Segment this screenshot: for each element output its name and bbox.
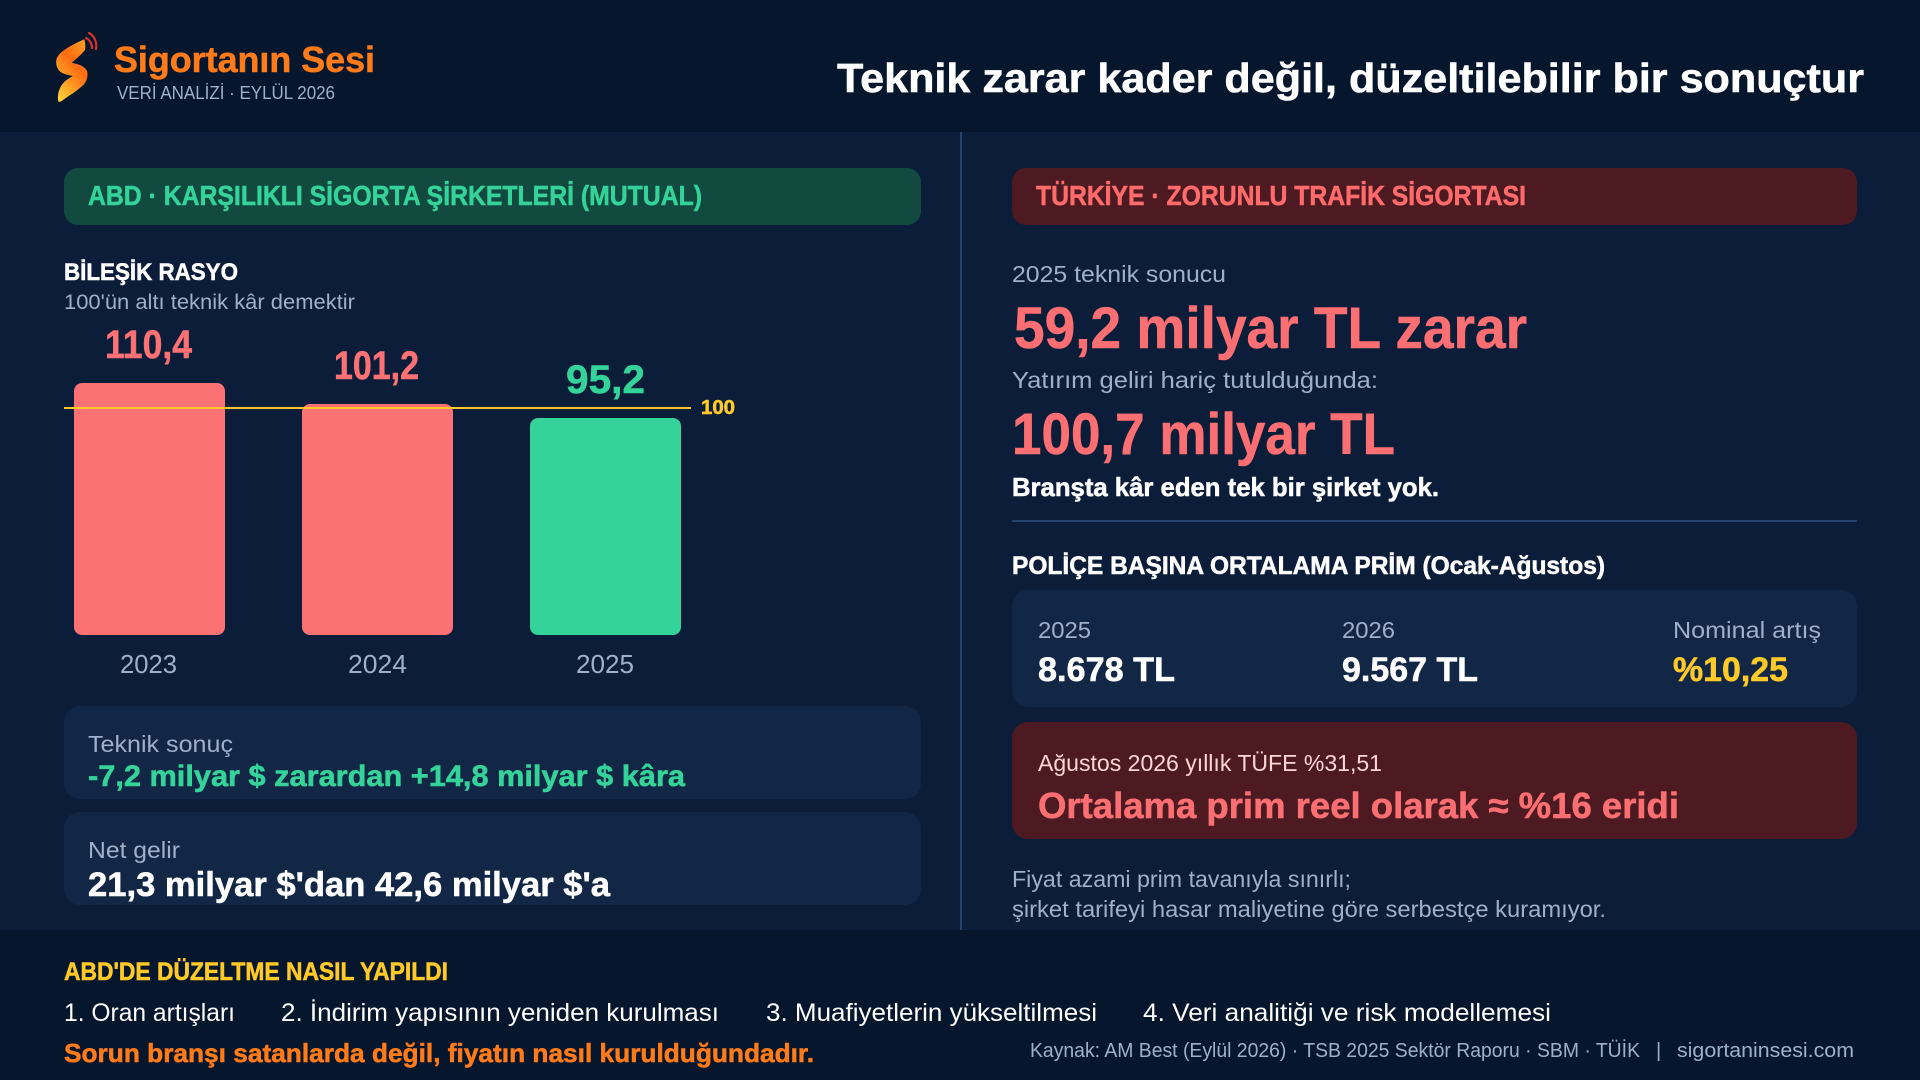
steps list: 1. Oran artışları bbox=[64, 999, 235, 1027]
panel: Turkey compulsory traffic insurance bbox=[1012, 168, 1857, 922]
steps list: 3. Muafiyetlerin yükseltilmesi bbox=[766, 999, 1097, 1027]
card: net income: Net gelir bbox=[88, 837, 180, 863]
bar 2025: 95,2 bbox=[566, 358, 645, 402]
header band bbox=[0, 0, 1920, 132]
card: net income: 21,3 milyar $'dan 42,6 milyar $'a bbox=[88, 866, 611, 904]
bar 2025 bbox=[530, 358, 681, 679]
source line: Kaynak: AM Best (Eylül 2026) · TSB 2025 Sektör Raporu · SBM · TÜİK bbox=[1030, 1039, 1641, 1062]
bar 2023: 110,4 bbox=[105, 323, 193, 367]
stat 2025 bbox=[1038, 617, 1175, 689]
stat 2026: 9.567 TL bbox=[1342, 651, 1478, 689]
steps list: 2. İndirim yapısının yeniden kurulması bbox=[281, 998, 719, 1027]
section tag: Turkey: TÜRKİYE · ZORUNLU TRAFİK SİGORTASI bbox=[1036, 180, 1526, 211]
section tag: USA: ABD · KARŞILIKLI SİGORTA ŞİRKETLERİ (MUTUAL) bbox=[88, 180, 702, 211]
card: technical result: Teknik sonuç bbox=[88, 731, 233, 757]
label: excluding investment income: Yatırım geliri hariç tutulduğunda: bbox=[1012, 367, 1378, 393]
source line: sigortaninsesi.com bbox=[1677, 1040, 1854, 1062]
bar 2023: 2023 bbox=[120, 649, 177, 679]
chart subheading: 100'ün altı teknik kâr demektir bbox=[64, 291, 355, 314]
big number: loss excluding investment: 100,7 milyar TL bbox=[1012, 402, 1395, 467]
title: Teknik zarar kader değil, düzeltilebilir bir sonuçtur bbox=[837, 55, 1864, 101]
card: technical result bbox=[64, 706, 921, 799]
bar 2024 bbox=[302, 344, 453, 679]
statement: Branşta kâr eden tek bir şirket yok. bbox=[1012, 472, 1439, 502]
chart heading: BİLEŞİK RASYO bbox=[64, 259, 238, 286]
reference line 100: 100 bbox=[701, 397, 735, 419]
bar chart: combined ratio bbox=[64, 323, 735, 679]
stat nominal increase: %10,25 bbox=[1673, 651, 1788, 689]
stat 2025: 2025 bbox=[1038, 617, 1091, 643]
source line: | bbox=[1656, 1040, 1661, 1062]
section tag: USA bbox=[64, 168, 921, 225]
panel divider bbox=[960, 132, 962, 930]
note: şirket tarifeyi hasar maliyetine göre serbestçe kuramıyor. bbox=[1012, 896, 1606, 922]
stat 2026: 2026 bbox=[1342, 617, 1395, 643]
card: average premium bbox=[1012, 590, 1857, 707]
bar 2024: 2024 bbox=[348, 649, 407, 679]
note: Fiyat azami prim tavanıyla sınırlı; bbox=[1012, 866, 1351, 892]
card: net income bbox=[64, 812, 921, 905]
logo icon bbox=[56, 33, 96, 102]
steps list: 4. Veri analitiği ve risk modellemesi bbox=[1143, 999, 1551, 1027]
section tag: Turkey bbox=[1012, 168, 1857, 225]
label: 2025 technical result: 2025 teknik sonucu bbox=[1012, 261, 1226, 287]
bar 2025: 2025 bbox=[576, 649, 634, 679]
big number: loss: 59,2 milyar TL zarar bbox=[1014, 296, 1527, 361]
premium heading: POLİÇE BAŞINA ORTALAMA PRİM (Ocak-Ağustos) bbox=[1012, 552, 1605, 580]
bar 2023 bbox=[74, 323, 225, 679]
footer heading: ABD'DE DÜZELTME NASIL YAPILDI bbox=[64, 957, 448, 986]
panel: USA mutual insurers bbox=[64, 168, 921, 905]
takeaway: Sorun branşı satanlarda değil, fiyatın nasıl kurulduğundadır. bbox=[64, 1038, 814, 1068]
callout: real premium erosion: Ortalama prim reel olarak ≈ %16 eridi bbox=[1038, 785, 1679, 826]
steps list bbox=[64, 998, 1551, 1027]
brand subtitle: VERİ ANALİZİ · EYLÜL 2026 bbox=[117, 83, 335, 103]
card: technical result: -7,2 milyar $ zarardan +14,8 milyar $ kâra bbox=[88, 760, 685, 793]
stat nominal increase: Nominal artış bbox=[1673, 617, 1821, 643]
footer band bbox=[0, 930, 1920, 1080]
note bbox=[1012, 866, 1606, 922]
stat nominal increase bbox=[1673, 617, 1821, 689]
callout: real premium erosion: Ağustos 2026 yıllık TÜFE %31,51 bbox=[1038, 750, 1382, 776]
bar 2024: 101,2 bbox=[334, 344, 419, 388]
callout: real premium erosion bbox=[1012, 722, 1857, 839]
brand name: Sigortanın Sesi bbox=[114, 39, 375, 80]
stat 2025: 8.678 TL bbox=[1038, 651, 1175, 689]
stat 2026 bbox=[1342, 617, 1478, 689]
